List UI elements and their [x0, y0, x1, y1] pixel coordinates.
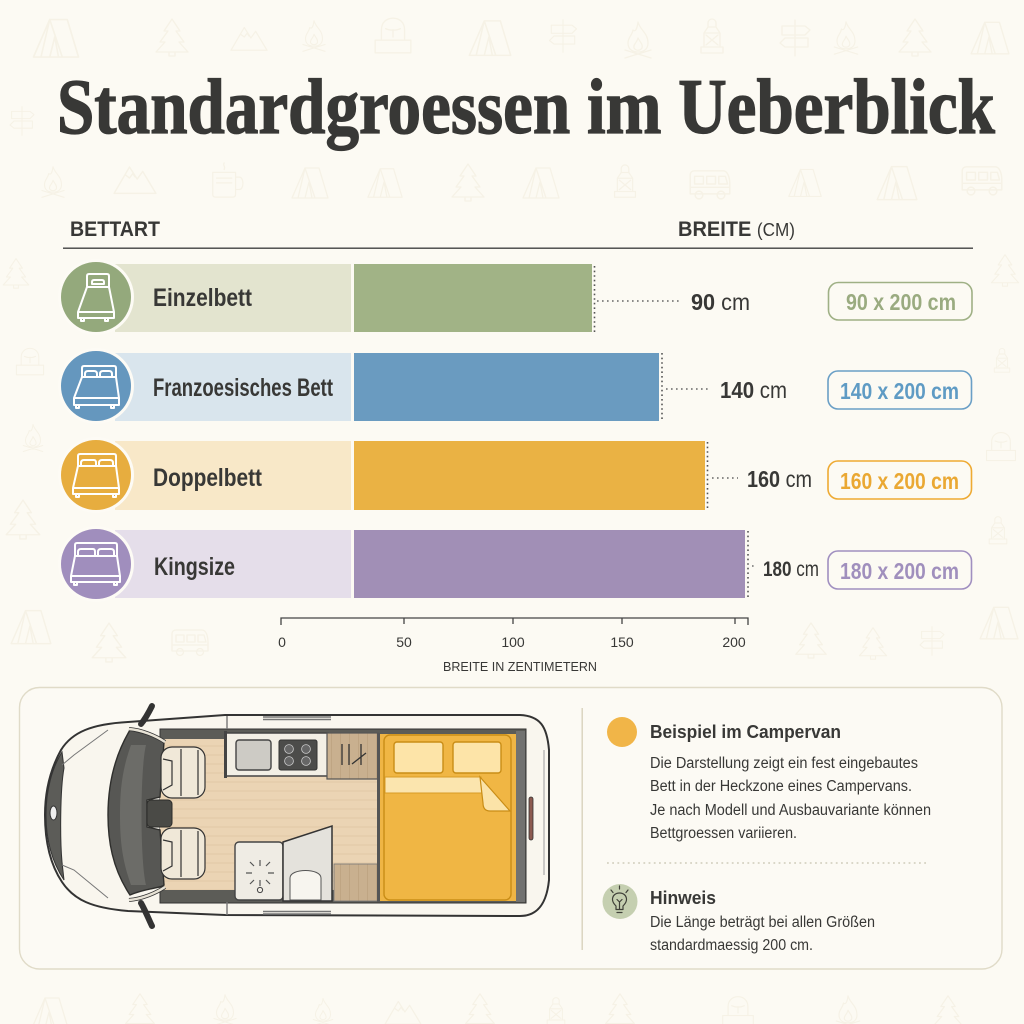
- mirror top: [141, 706, 152, 724]
- axis: 0: [278, 634, 286, 650]
- pillow left: [394, 742, 443, 773]
- value: 180 cm: [763, 558, 819, 581]
- axis title: BREITE IN ZENTIMETERN: [443, 660, 597, 674]
- axis: 150: [610, 634, 634, 650]
- axis: 200: [722, 634, 746, 650]
- upper cabinet: [327, 733, 378, 779]
- label: Einzelbett: [153, 284, 253, 312]
- body: [650, 755, 931, 842]
- body: Die Darstellung zeigt ein fest eingebautes: [650, 755, 918, 772]
- center console: [147, 800, 172, 827]
- axis: 50: [396, 634, 412, 650]
- row: Doppelbett: [58, 437, 972, 513]
- body: Je nach Modell und Ausbauvariante können: [650, 802, 931, 819]
- orange dot: [607, 717, 637, 747]
- seat bottom: [161, 828, 205, 879]
- door trims: [129, 729, 165, 900]
- bed platform: [380, 734, 516, 901]
- heading: Beispiel im Campervan: [650, 722, 841, 742]
- body: Bett in der Heckzone eines Campervans.: [650, 778, 912, 795]
- windshield and dash: [108, 730, 164, 895]
- seat top: [161, 747, 205, 798]
- icon: french bed: [61, 351, 131, 421]
- grille: [46, 752, 64, 880]
- text block: Beispiel im Campervan: [607, 717, 931, 842]
- size pill: [828, 371, 972, 409]
- lower cabinet: [334, 864, 378, 901]
- table header: [63, 218, 973, 249]
- bar: 160 cm: [354, 441, 705, 510]
- value: 140 cm: [720, 377, 787, 403]
- heading: Hinweis: [650, 888, 716, 908]
- blanket corner: [480, 777, 510, 811]
- size pill: [828, 282, 972, 320]
- campervan floor plan: [45, 706, 549, 926]
- column heading: Breite: BREITE (CM): [678, 218, 795, 241]
- size pill: 180 x 200 cm: [840, 558, 959, 584]
- mattress: [384, 735, 511, 900]
- value: 160 cm: [747, 466, 812, 492]
- toilet room: [283, 826, 332, 901]
- axis: [278, 618, 748, 674]
- row: Einzelbett: [58, 259, 972, 335]
- floor: [160, 739, 380, 890]
- label: Doppelbett: [153, 464, 263, 492]
- size pill: [828, 461, 972, 499]
- icon: light bulb: [602, 884, 638, 919]
- label: Franzoesisches Bett: [153, 374, 333, 402]
- icon: king bed: [61, 529, 131, 599]
- text block: Hinweis: [602, 884, 875, 954]
- sink: [236, 740, 271, 770]
- size pill: [828, 551, 972, 589]
- column heading: Bettart: BETTART: [70, 218, 160, 241]
- body: Bettgroessen variieren.: [650, 825, 797, 842]
- rear grey strip: [516, 731, 525, 902]
- label: Kingsize: [154, 553, 235, 581]
- axis: 100: [501, 634, 525, 650]
- body: [650, 914, 875, 954]
- shower: [235, 842, 283, 900]
- rear door strip: [543, 750, 545, 875]
- taillight: [529, 797, 533, 840]
- stove: [279, 740, 317, 770]
- size pill: 160 x 200 cm: [840, 468, 959, 494]
- value: 90 cm: [691, 289, 750, 315]
- body: standardmaessig 200 cm.: [650, 937, 813, 954]
- row: Kingsize: [58, 526, 972, 602]
- cabin interior dark: [160, 729, 526, 903]
- body: Die Länge beträgt bei allen Größen: [650, 914, 875, 931]
- bar: 90 cm: [354, 264, 592, 332]
- van body: [45, 715, 549, 916]
- bar: 180 cm: [354, 530, 745, 598]
- size pill: 90 x 200 cm: [846, 289, 956, 315]
- row: Franzoesisches Bett: [58, 348, 972, 424]
- icon: single bed: [61, 262, 131, 332]
- icon: double bed: [61, 440, 131, 510]
- kitchen counter: [225, 733, 328, 776]
- size pill: 140 x 200 cm: [840, 378, 959, 404]
- panel: campervan example: [20, 688, 1002, 969]
- pillow right: [453, 742, 501, 773]
- folded blanket: [385, 777, 482, 793]
- side rails: [227, 716, 331, 915]
- bar: 140 cm: [354, 353, 659, 421]
- mirror bottom: [141, 903, 152, 926]
